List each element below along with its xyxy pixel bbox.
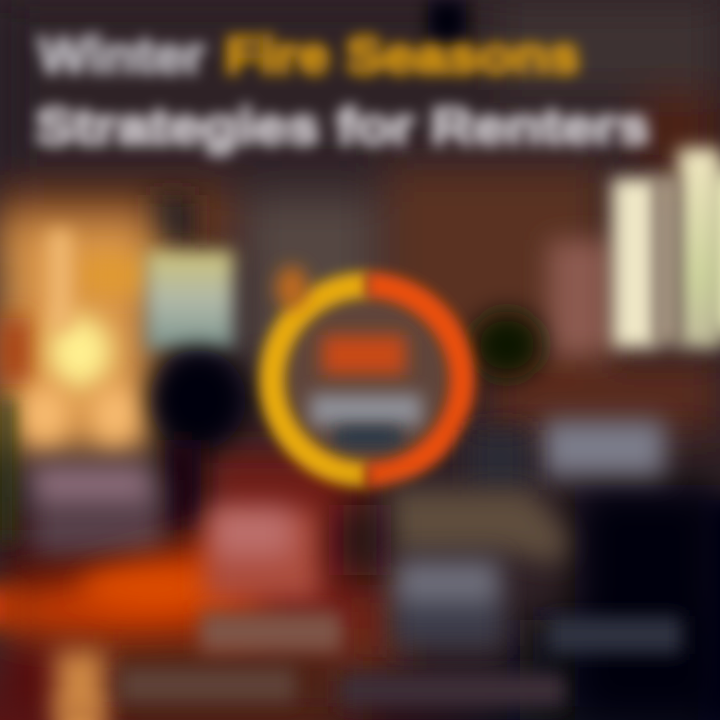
brown heading strip [388,490,568,565]
dark armchair [150,350,246,450]
small card beside grey stat [470,430,530,490]
fireplace glow [0,215,155,450]
centre orange value [322,335,406,375]
dark post [342,505,378,575]
centre teal label [335,428,401,446]
left text card [32,465,162,556]
dark armchair lower [165,440,201,530]
title line 1 yellow: Fire Seasons [225,27,580,85]
grey stat card centre [393,560,503,646]
orange rug band [0,530,260,639]
ring flame ear [276,266,308,310]
title line 1 white: Winter [38,27,205,85]
ceiling beam dark spot [428,0,466,42]
grey stat card right [543,420,665,476]
left edge plant [0,400,14,540]
dark vertical beam [150,195,195,245]
dark green plant [471,311,543,379]
dark lower right room [575,485,720,720]
right windows [612,148,720,348]
candle glow [55,650,105,720]
title [35,27,650,156]
left window [146,250,234,350]
dark lower right edge [680,500,720,720]
centre grey label [310,394,422,426]
caption blocks [120,612,682,706]
red text card [205,505,320,600]
donut chart [272,266,462,475]
right wall panel [548,240,610,355]
ring yellow half [272,285,367,475]
ring centre backdrop [279,292,455,468]
ring orange half [367,285,462,475]
floor backing [0,675,720,720]
title line 2 white: Strategies for Renters [35,98,650,156]
